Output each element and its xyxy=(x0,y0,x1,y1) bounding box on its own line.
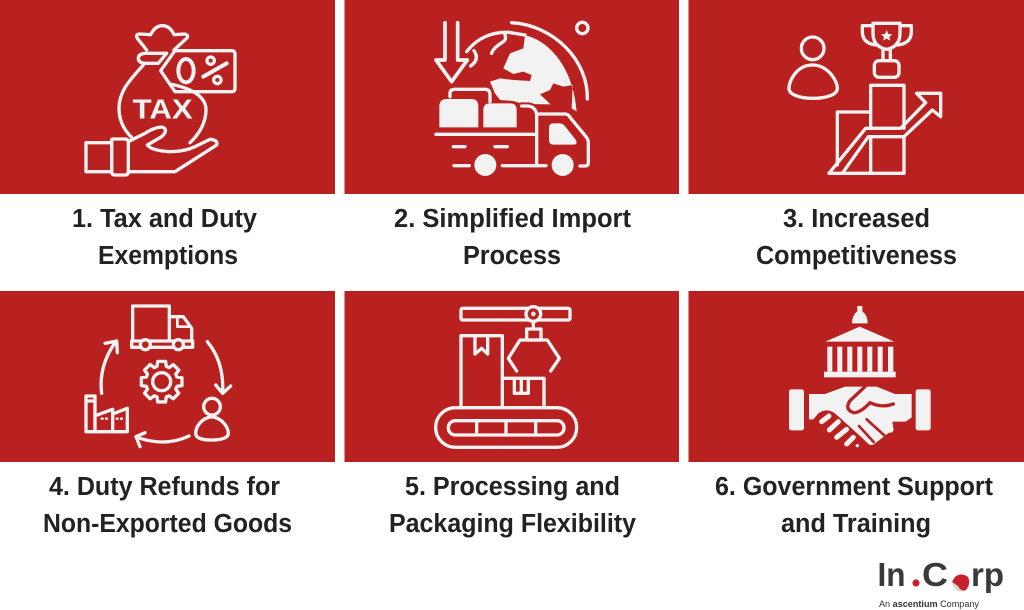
logo: InCorp: In xyxy=(878,556,906,593)
panel: government support and training xyxy=(688,291,1024,538)
logo: InCorp xyxy=(878,556,1004,609)
icon text: TAX: TAX xyxy=(133,94,193,125)
icon: person, trophy, podium and rising arrow xyxy=(789,23,941,173)
icon: tax bag on hand with 0% tag xyxy=(86,26,235,175)
heading: simplified import process: Process xyxy=(463,242,561,270)
panel: processing and packaging flexibility xyxy=(344,291,679,538)
heading: simplified import process xyxy=(394,205,631,270)
heading: tax and duty exemptions: Exemptions xyxy=(98,242,238,270)
heading: government support xyxy=(715,473,993,538)
heading: increased competitiveness: 3. Increased xyxy=(783,205,930,233)
icon: truck, globe and down arrow xyxy=(436,22,588,176)
heading: processing and packaging: 5. Processing and xyxy=(405,473,620,501)
logo: InCorp: An ascentium Company xyxy=(879,599,979,609)
logo: InCorp: C xyxy=(922,556,948,593)
panel: tax and duty exemptions xyxy=(0,0,335,270)
heading: increased competitiveness: Competitiveness xyxy=(756,242,957,270)
heading: tax and duty exemptions xyxy=(72,205,258,270)
heading: simplified import process: 2. Simplified Import xyxy=(394,205,631,233)
heading: government support: 6. Government Support xyxy=(715,473,993,501)
panel: simplified import process xyxy=(344,0,679,270)
heading: processing and packaging: Packaging Flexibility xyxy=(389,510,637,538)
icon: logo globe xyxy=(952,574,970,592)
heading: duty refunds xyxy=(43,473,292,538)
heading: increased competitiveness xyxy=(756,205,957,270)
heading: government support: and Training xyxy=(781,510,931,538)
heading: duty refunds: 4. Duty Refunds for xyxy=(49,473,280,501)
heading: duty refunds: Non-Exported Goods xyxy=(43,510,292,538)
panel: duty refunds for non-exported goods xyxy=(0,291,335,538)
panel: increased competitiveness xyxy=(688,0,1024,270)
heading: processing and packaging xyxy=(389,473,637,538)
heading: tax and duty exemptions: 1. Tax and Duty xyxy=(72,205,258,233)
icon: government building and handshake xyxy=(789,306,931,447)
icon: conveyor belt with robotic claw and boxes xyxy=(436,307,577,447)
icon: truck, person and factory cycle with gear xyxy=(86,306,231,447)
logo: InCorp: rp xyxy=(971,556,1004,593)
